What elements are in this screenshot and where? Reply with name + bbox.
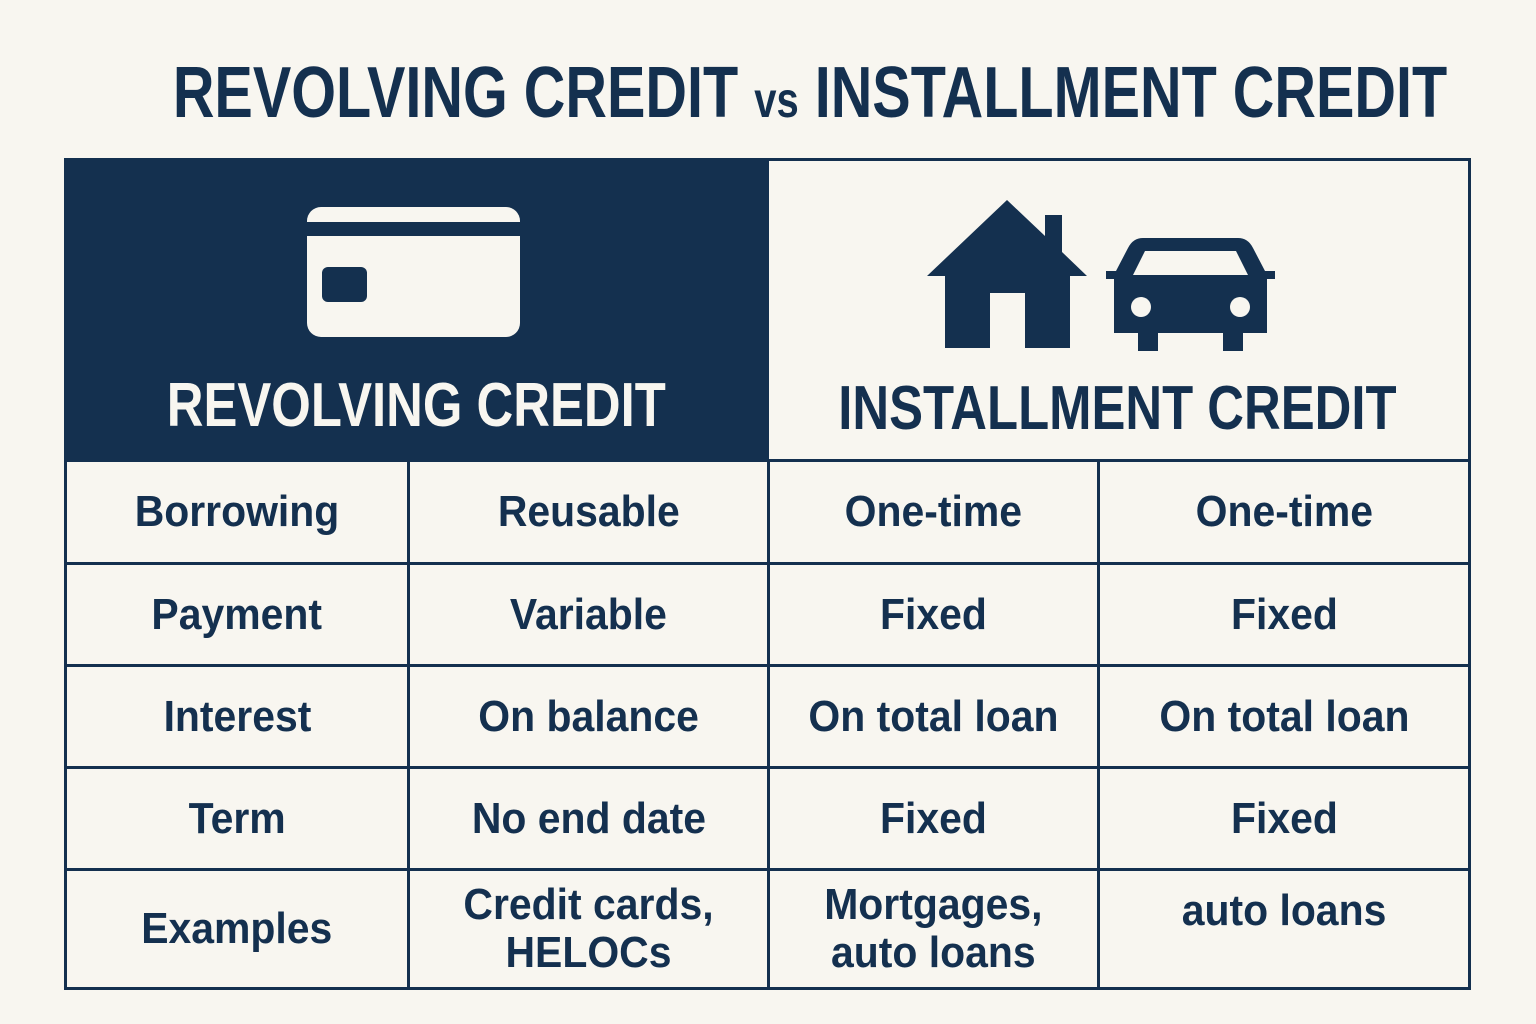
comparison table: Fixed bbox=[880, 590, 987, 638]
comparison table: Reusable bbox=[498, 487, 679, 536]
comparison table: Fixed bbox=[1231, 794, 1337, 842]
panel: installment header bbox=[767, 158, 1471, 462]
icon: house bbox=[927, 200, 1087, 348]
comparison table: Credit cards, bbox=[463, 880, 714, 929]
icon: credit card bbox=[307, 207, 520, 337]
panel: revolving header bbox=[64, 158, 769, 462]
comparison table: No end date bbox=[471, 794, 706, 842]
comparison table: On total loan bbox=[1159, 692, 1409, 740]
comparison table: Interest bbox=[163, 692, 311, 740]
comparison table: Fixed bbox=[1231, 590, 1337, 638]
comparison table: On total loan bbox=[808, 692, 1059, 740]
comparison table: Mortgages, bbox=[824, 880, 1043, 929]
icon: car bbox=[1106, 238, 1275, 351]
comparison table: Borrowing bbox=[135, 487, 339, 536]
comparison table: Term bbox=[188, 794, 286, 842]
comparison table: Variable bbox=[510, 590, 667, 638]
comparison table: auto loans bbox=[1182, 886, 1386, 935]
comparison table: Fixed bbox=[880, 794, 987, 842]
comparison table: Examples bbox=[141, 904, 333, 953]
heading: installment credit: INSTALLMENT CREDIT bbox=[838, 374, 1397, 443]
title: REVOLVING CREDIT vs INSTALLMENT CREDIT bbox=[173, 53, 1447, 133]
comparison table: One-time bbox=[845, 487, 1022, 536]
comparison table: HELOCs bbox=[505, 928, 671, 977]
heading: revolving credit: REVOLVING CREDIT bbox=[167, 371, 666, 440]
comparison table: One-time bbox=[1195, 487, 1373, 536]
comparison table: Payment bbox=[152, 590, 322, 638]
comparison table: auto loans bbox=[831, 928, 1036, 977]
comparison table: On balance bbox=[478, 692, 699, 740]
